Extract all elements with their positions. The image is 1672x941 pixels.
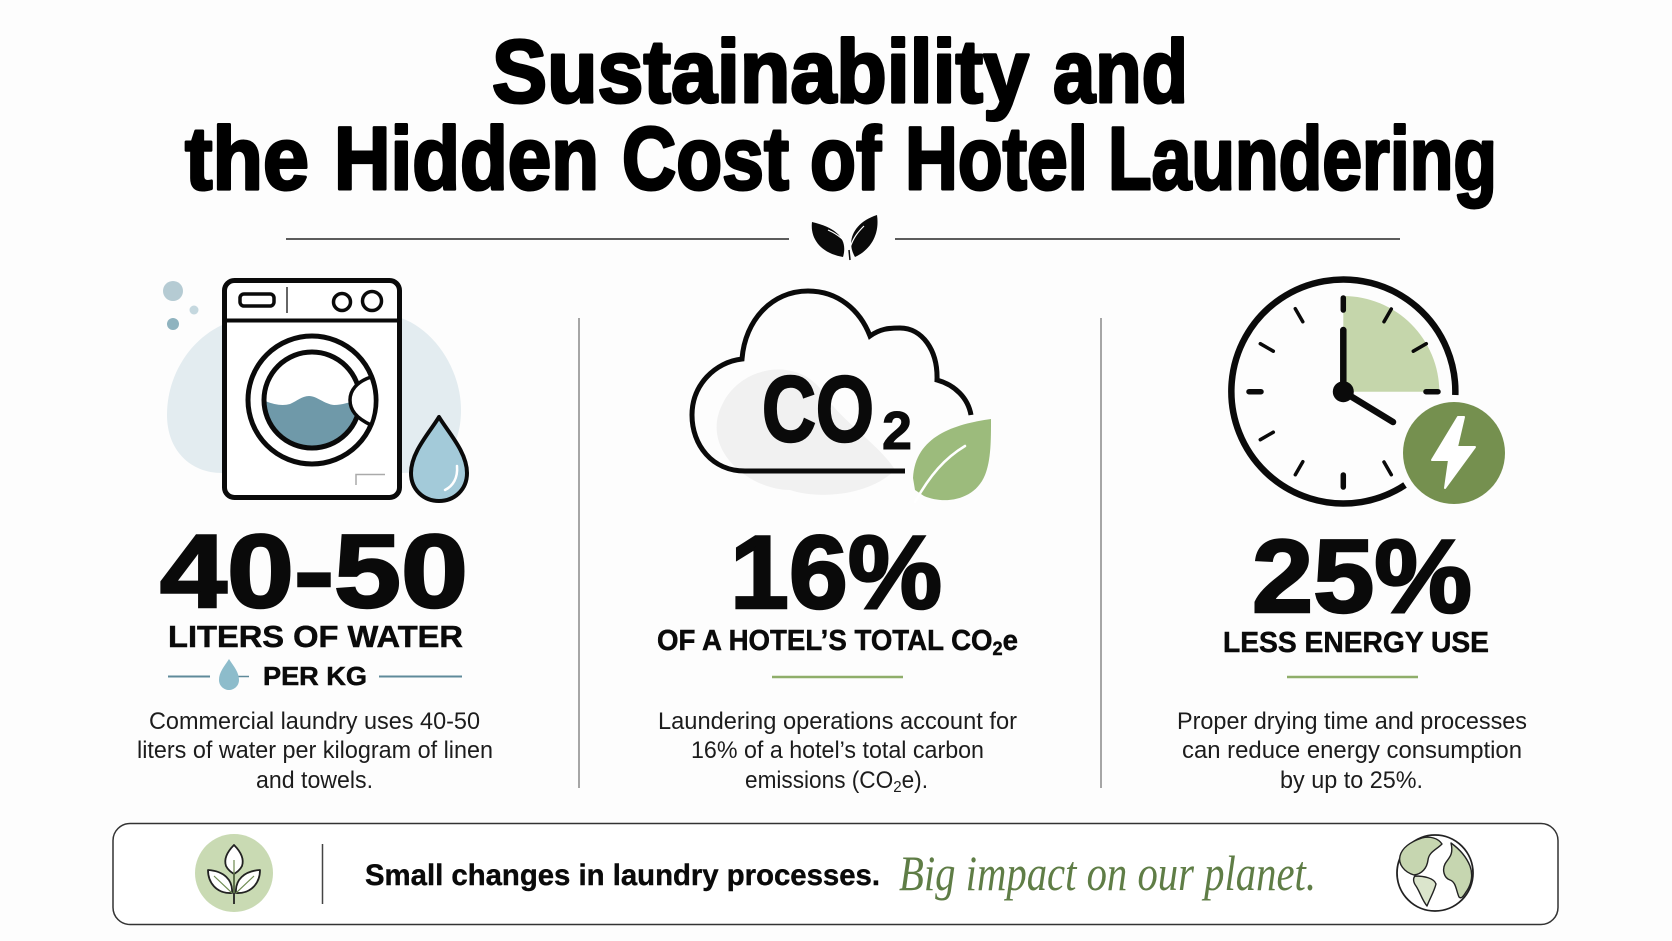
panel: energy use — [1177, 279, 1527, 794]
slogan: small changes: Small changes in laundry processes. — [365, 859, 880, 892]
description: carbon: 2 — [893, 779, 902, 796]
description: energy: can reduce energy consumption — [1182, 737, 1522, 764]
title: Hotel — [905, 108, 1088, 208]
title: the — [185, 108, 309, 208]
description: energy: Proper drying time and processes — [1177, 708, 1527, 735]
title: Laundering — [1108, 108, 1497, 208]
title — [185, 21, 1497, 208]
title: Cost — [622, 108, 789, 208]
description: water: and towels. — [256, 767, 373, 794]
description: water: liters of water per kilogram of linen — [137, 737, 493, 764]
title: Sustainability — [492, 21, 1029, 121]
icon: CO2 cloud with leaf: CO — [762, 357, 874, 461]
accent line: carbon — [772, 676, 903, 678]
title: and — [1053, 21, 1188, 121]
description: carbon: 16% of a hotel’s total carbon — [691, 737, 984, 764]
label: less energy use: LESS ENERGY USE — [1223, 627, 1489, 659]
description: carbon: emissions (CO — [745, 767, 902, 794]
big number: 40-50: 40-50 — [160, 514, 468, 630]
icon: plant in green circle — [195, 834, 273, 912]
big number: 16%: 16% — [730, 515, 942, 631]
label row: per kg with drop: PER KG — [263, 661, 367, 691]
icon: clock with energy bolt — [1231, 279, 1505, 504]
slogan: big impact: Big impact on our planet. — [899, 845, 1316, 901]
description: carbon: Laundering operations account for — [658, 708, 1017, 735]
panel: bottom callout banner — [113, 824, 1558, 924]
title: of — [810, 108, 881, 208]
title: Hidden — [334, 108, 599, 208]
description: energy — [1177, 708, 1527, 794]
label: of a hotel's total CO2e: OF A HOTEL’S TOTAL CO — [657, 625, 1009, 657]
label row: per kg with drop — [168, 659, 462, 691]
label: of a hotel's total CO2e: e — [1003, 625, 1018, 657]
big number: 25%: 25% — [1252, 519, 1472, 635]
description: energy: by up to 25%. — [1280, 767, 1423, 794]
title divider with leaf icon — [286, 215, 1400, 260]
panel: water use — [137, 280, 493, 794]
description: water — [137, 708, 493, 794]
column dividers — [579, 318, 1101, 788]
label: of a hotel's total CO2e: 2 — [993, 639, 1003, 660]
description: carbon: e). — [902, 767, 928, 794]
description: water: Commercial laundry uses 40-50 — [149, 708, 480, 735]
icon: washing machine with water — [163, 280, 467, 501]
panel: carbon emissions — [657, 291, 1018, 796]
icon: globe — [1397, 835, 1473, 911]
label: liters of water: LITERS OF WATER — [168, 619, 463, 654]
accent line: energy — [1287, 676, 1418, 678]
description: carbon — [658, 708, 1017, 796]
icon: CO2 cloud with leaf — [692, 291, 991, 502]
icon: CO2 cloud with leaf: 2 — [882, 401, 912, 461]
